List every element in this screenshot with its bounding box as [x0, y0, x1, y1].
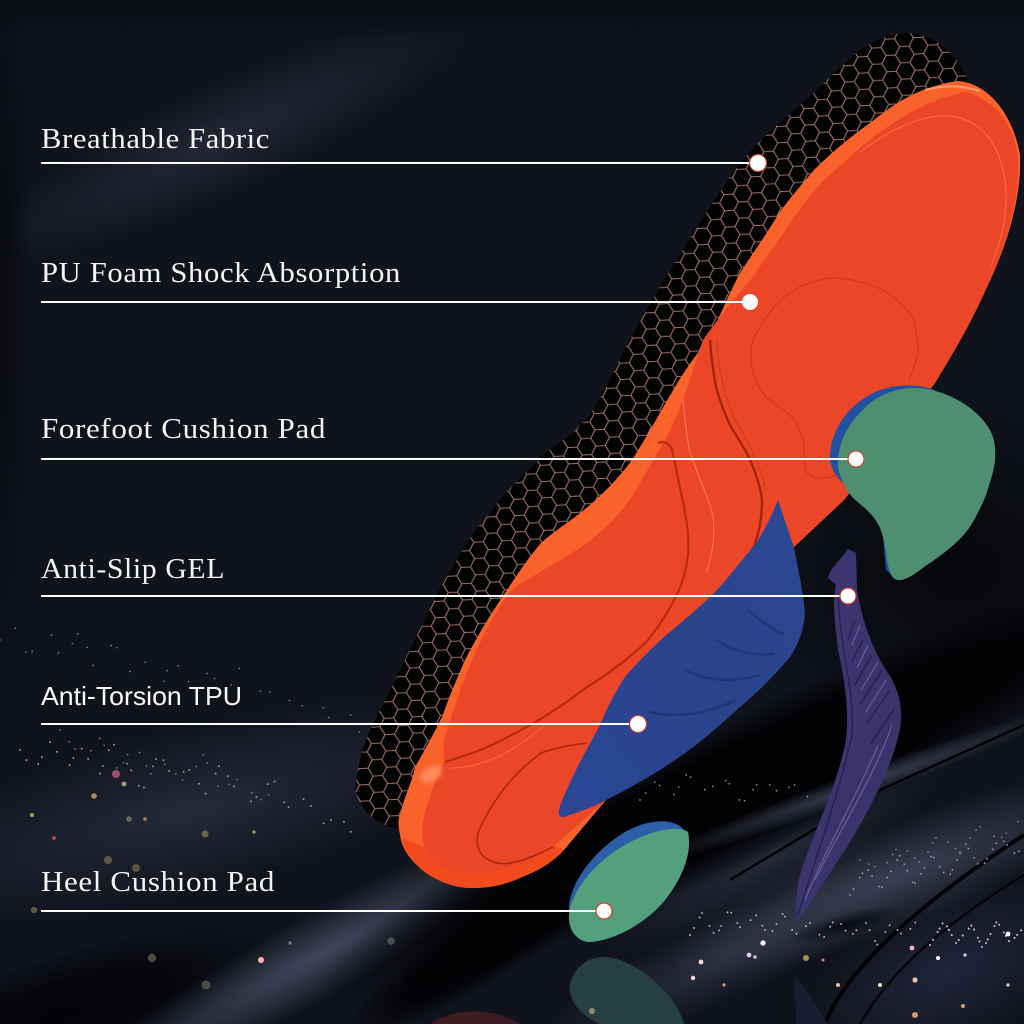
heel shaded edge	[402, 838, 564, 888]
icon: blue TPU arch support	[559, 500, 805, 817]
arch highlight	[683, 400, 714, 573]
icon: anti-slip gel strip	[796, 549, 901, 921]
callout: Anti-Slip GEL	[41, 553, 856, 604]
ridge highlight	[450, 725, 545, 768]
callout: Breathable Fabric: Breathable Fabric	[41, 123, 270, 155]
callout: Forefoot Cushion Pad	[41, 413, 864, 467]
callout: Anti-Slip GEL: Anti-Slip GEL	[41, 553, 225, 585]
forefoot outline	[860, 116, 1006, 268]
rim hot spot	[417, 762, 445, 786]
sparkles: scattered glitter on fabric	[0, 626, 1024, 949]
callout: PU Foam Shock Absorption: PU Foam Shock Absorption	[41, 257, 401, 289]
callout: Forefoot Cushion Pad: Forefoot Cushion Pad	[41, 413, 326, 445]
top highlight	[925, 86, 980, 91]
insole footbed	[422, 92, 1018, 874]
callout: Heel Cushion Pad	[41, 866, 612, 919]
arch groove right	[710, 340, 762, 557]
callout: Anti-Torsion TPU: Anti-Torsion TPU	[41, 681, 242, 711]
callout: Heel Cushion Pad: Heel Cushion Pad	[41, 866, 275, 898]
icon: forefoot cushion pad	[830, 385, 995, 580]
insole body with bright rim	[398, 81, 1020, 888]
gel ridges	[798, 595, 895, 915]
icon: heel cushion pad	[569, 821, 689, 942]
callout: PU Foam Shock Absorption	[41, 257, 758, 310]
TPU ridges	[650, 610, 783, 715]
reflection: faded heel pad	[430, 957, 828, 1024]
metatarsal pad outline	[751, 278, 918, 478]
callout: Breathable Fabric	[41, 123, 766, 172]
arch groove left	[445, 442, 688, 762]
heel cup oval	[477, 743, 587, 864]
icon: orange PU foam insole	[398, 81, 1020, 888]
icon: breathable mesh layer	[355, 33, 985, 830]
callout: Anti-Torsion TPU	[41, 681, 646, 732]
